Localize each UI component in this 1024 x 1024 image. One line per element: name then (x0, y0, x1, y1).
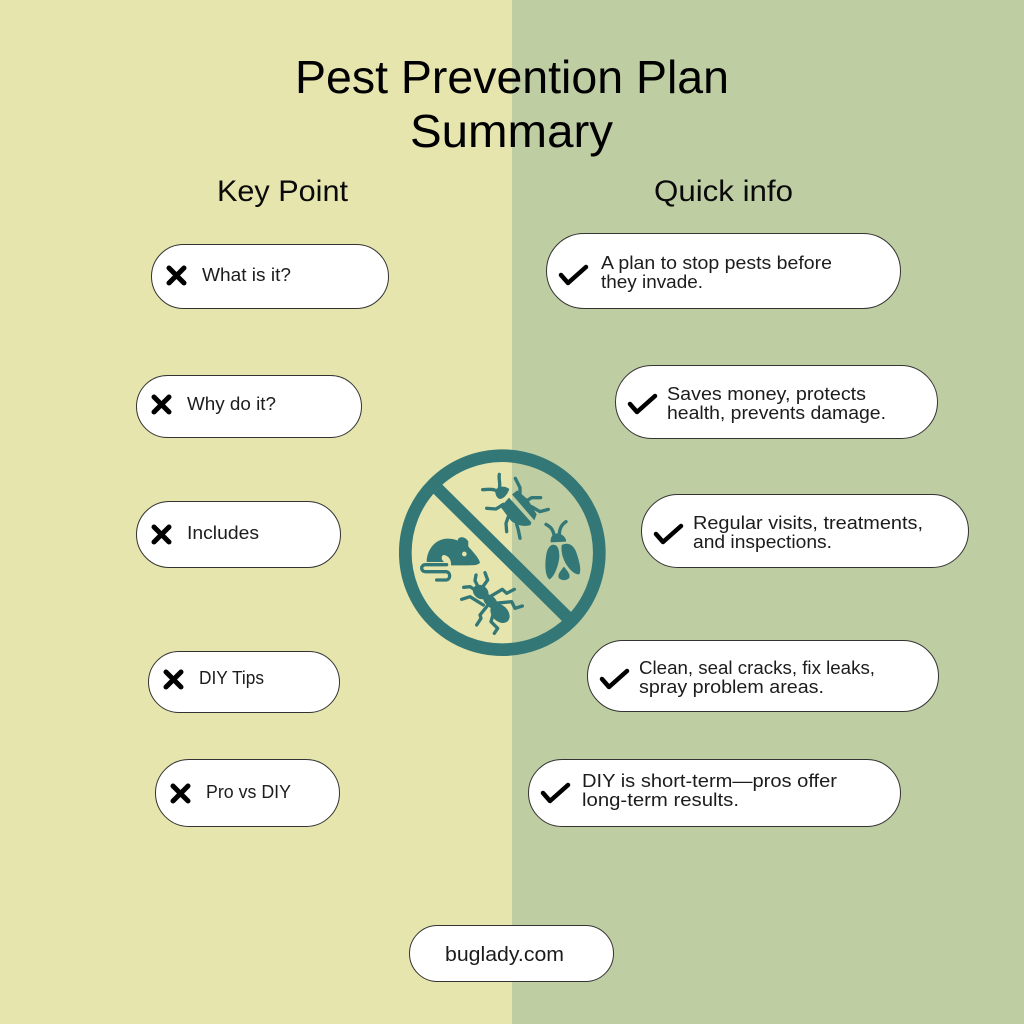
website pill: buglady.com (445, 944, 564, 966)
quick info: what it is: they invade. (601, 272, 703, 292)
icon: rat (422, 537, 480, 580)
icon: no pests sign (405, 456, 599, 650)
key point: what is it: What is it? (202, 265, 291, 285)
quick info: what it is (546, 234, 900, 308)
quick info: includes: Regular visits, treatments, (693, 513, 923, 533)
quick info: includes: and inspections. (693, 532, 832, 552)
icon: firefly (545, 522, 580, 580)
quick info: diy tips: spray problem areas. (639, 677, 824, 697)
quick info: why: Saves money, protects (667, 384, 866, 404)
key point: diy tips: DIY Tips (199, 668, 264, 688)
quick info: includes (642, 494, 968, 568)
key point: why do it (136, 376, 362, 438)
quick info: pro vs diy (528, 760, 900, 826)
heading: key point: Key Point (217, 175, 349, 208)
key point: includes: Includes (187, 523, 259, 543)
title: Summary (410, 105, 613, 157)
key point: pro vs diy: Pro vs DIY (206, 782, 291, 802)
quick info: why (616, 366, 938, 438)
title (295, 51, 729, 157)
key point: pro vs diy (156, 760, 340, 826)
heading: quick info: Quick info (654, 175, 793, 208)
quick info: why: health, prevents damage. (667, 403, 886, 423)
quick info: diy tips (588, 640, 938, 712)
icon: prohibition ring (405, 456, 599, 650)
quick info: pro vs diy: long-term results. (582, 790, 739, 810)
quick info: diy tips: Clean, seal cracks, fix leaks, (639, 658, 875, 678)
quick info: what it is: A plan to stop pests before (601, 253, 832, 273)
icon: beetle (483, 474, 548, 538)
website pill (410, 926, 614, 982)
quick info: pro vs diy: DIY is short-term—pros offer (582, 771, 837, 791)
key point: includes (136, 502, 340, 568)
icon: ant (462, 573, 522, 633)
title: Pest Prevention Plan (295, 51, 729, 103)
key point: what is it (152, 244, 388, 308)
key point: why do it: Why do it? (187, 394, 276, 414)
key point: diy tips (148, 652, 340, 712)
